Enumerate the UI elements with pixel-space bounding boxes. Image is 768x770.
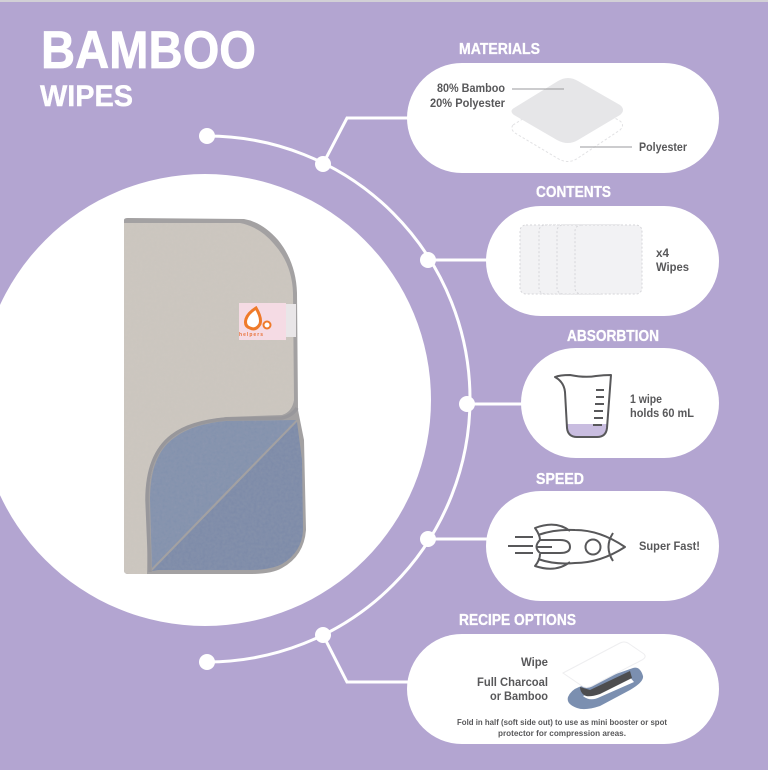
panel: recipe options bbox=[407, 612, 719, 744]
label: x4 bbox=[656, 248, 670, 260]
sewn label: helpers bbox=[239, 332, 263, 338]
panel: materials: 20% Polyester bbox=[430, 98, 505, 110]
icon: four wipes bbox=[520, 225, 642, 294]
wipe back layer bbox=[124, 218, 306, 574]
panel: materials bbox=[407, 41, 719, 173]
blue lower panel bbox=[152, 422, 303, 571]
label: polyester bbox=[580, 146, 632, 148]
label: Super Fast! bbox=[639, 541, 700, 553]
label: layer names: Wipe bbox=[521, 657, 548, 669]
label: 1 wipe bbox=[630, 394, 662, 406]
beige fleece bbox=[124, 223, 294, 574]
icon: fabric layers bbox=[512, 78, 623, 162]
title: BAMBOO bbox=[41, 21, 256, 80]
panel: recipe options: Full Charcoal bbox=[477, 677, 548, 689]
label: bamboo blend: 80% Bamboo bbox=[437, 83, 505, 95]
icon: measuring cup bbox=[555, 375, 611, 437]
product circle bbox=[0, 174, 431, 626]
heading: SPEED bbox=[536, 471, 584, 488]
heading: ABSORBTION bbox=[567, 328, 659, 345]
panel: recipe options: or Bamboo bbox=[490, 691, 548, 703]
title bbox=[40, 21, 256, 113]
heading: CONTENTS bbox=[536, 184, 611, 201]
panel: contents bbox=[486, 184, 719, 316]
icon: rocket bbox=[508, 525, 625, 569]
heading: RECIPE OPTIONS bbox=[459, 612, 576, 629]
blue folded flap bbox=[150, 420, 296, 568]
title: WIPES bbox=[40, 80, 133, 113]
product photo: folded wipe bbox=[124, 218, 306, 574]
connector arc and nodes bbox=[199, 118, 522, 682]
panel: speed bbox=[486, 471, 719, 601]
panel: materials: Polyester bbox=[639, 142, 687, 154]
panel: absorbtion bbox=[521, 328, 719, 458]
heading: MATERIALS bbox=[459, 41, 540, 58]
panel: absorbtion: holds 60 mL bbox=[630, 408, 694, 420]
note: Fold in half (soft side out) to use as mini booster or spot bbox=[457, 718, 667, 727]
panel: recipe options: protector for compression areas. bbox=[498, 729, 626, 738]
sewn label bbox=[239, 303, 296, 340]
flap hem bbox=[147, 408, 297, 572]
icon: folded layers bbox=[563, 642, 645, 709]
panel: contents: Wipes bbox=[656, 262, 689, 274]
